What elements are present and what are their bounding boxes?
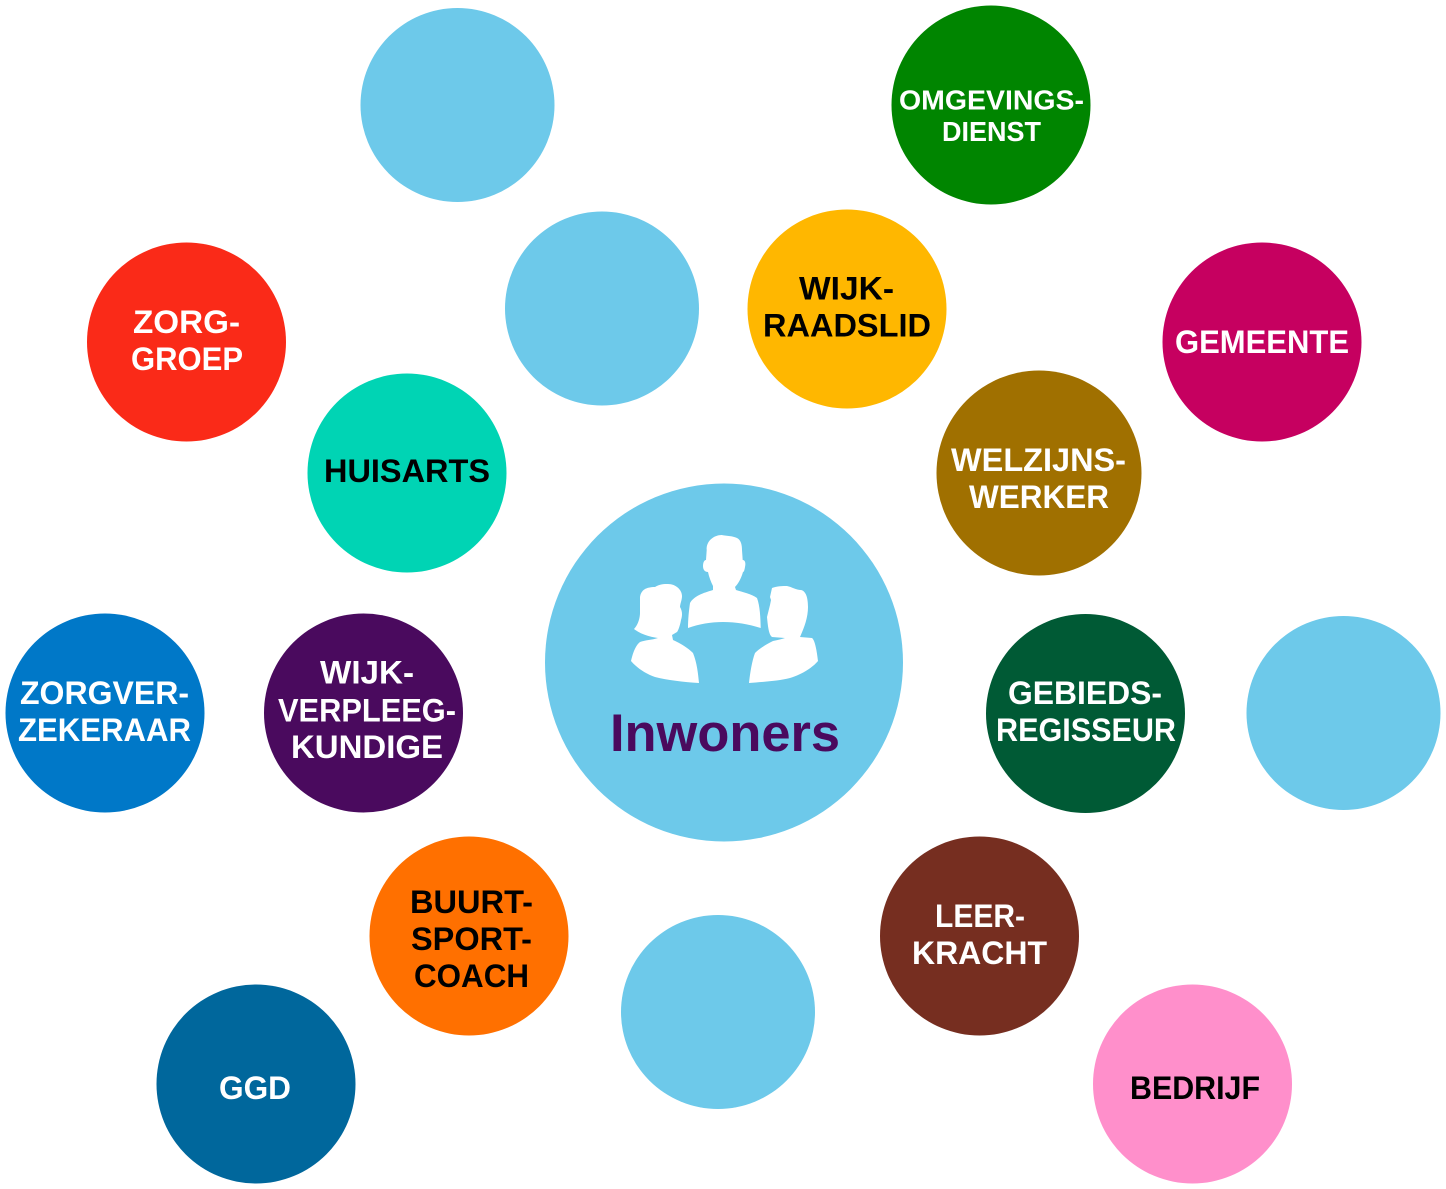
empty light blue circle top — [360, 8, 554, 202]
circle: gebiedsregisseur: REGISSEUR — [996, 712, 1176, 748]
circle: wijkverpleegkundige — [264, 614, 463, 812]
circle: buurtsportcoach: COACH — [414, 958, 529, 994]
circle: omgevingsdienst — [892, 6, 1090, 204]
circle: zorgverzekeraar: ZORGVER- — [20, 675, 189, 711]
circle: buurtsportcoach — [370, 836, 568, 1036]
circle: zorggroep: ZORG- — [133, 304, 240, 340]
empty light blue circle bottom — [621, 915, 815, 1109]
circle: welzijnswerker: WERKER — [969, 479, 1109, 515]
circle: zorggroep: GROEP — [131, 341, 243, 377]
circle: wijkverpleegkundige: VERPLEEG- — [278, 692, 456, 728]
empty light blue circle upper middle — [505, 212, 699, 406]
central circle: inwoners — [545, 484, 903, 842]
circle: gebiedsregisseur: GEBIEDS- — [1008, 675, 1162, 711]
circle: gemeente: GEMEENTE — [1175, 324, 1349, 360]
label: inwoners: Inwoners — [610, 704, 840, 763]
circle: wijkverpleegkundige: KUNDIGE — [291, 729, 443, 765]
circle: zorgverzekeraar: ZEKERAAR — [18, 712, 191, 748]
circle: zorggroep — [87, 242, 286, 442]
circle: buurtsportcoach: SPORT- — [411, 921, 532, 957]
circle: huisarts — [308, 374, 506, 572]
circle: huisarts: HUISARTS — [324, 453, 490, 489]
circle: buurtsportcoach: BUURT- — [410, 884, 533, 920]
circle: ggd — [156, 984, 356, 1184]
empty light blue circle right — [1246, 616, 1440, 810]
circle: ggd: GGD — [219, 1070, 291, 1106]
icon: three people around a table — [631, 535, 818, 683]
circle: leerkracht: LEER- — [935, 898, 1025, 934]
circle: wijkraadslid: WIJK- — [799, 270, 894, 306]
circle: welzijnswerker — [936, 370, 1142, 576]
circle: omgevingsdienst: DIENST — [942, 116, 1041, 147]
circle: bedrijf — [1093, 984, 1292, 1184]
circle: wijkverpleegkundige: WIJK- — [320, 654, 414, 690]
circle: leerkracht — [880, 836, 1079, 1036]
circle: welzijnswerker: WELZIJNS- — [951, 442, 1126, 478]
circle: bedrijf: BEDRIJF — [1130, 1070, 1260, 1106]
circle: zorgverzekeraar — [6, 614, 204, 812]
circle: omgevingsdienst: OMGEVINGS- — [899, 84, 1084, 116]
circle: wijkraadslid — [748, 210, 946, 408]
circle: gebiedsregisseur — [986, 614, 1185, 813]
circle: gemeente — [1162, 242, 1362, 442]
circle: wijkraadslid: RAADSLID — [763, 308, 931, 344]
circle: leerkracht: KRACHT — [912, 935, 1047, 971]
